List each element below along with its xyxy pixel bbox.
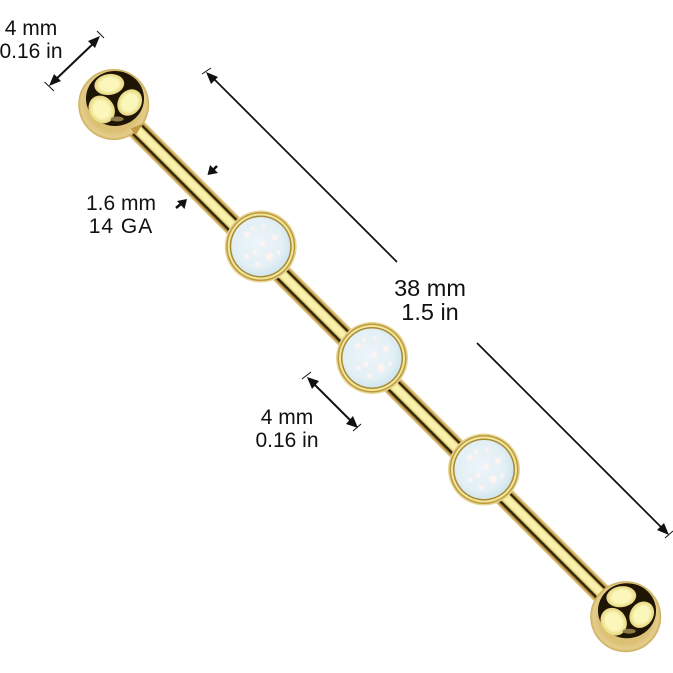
- label: gem size: [255, 406, 319, 452]
- barbell shaft: [106, 99, 632, 624]
- opal gem 1: [225, 210, 297, 282]
- label: ball size: 0.16 in: [0, 40, 63, 63]
- opal gem 3: [448, 434, 520, 506]
- label: length: 1.5 in: [401, 299, 459, 325]
- arrow: overall length lower: [477, 343, 673, 538]
- arrow: ball diameter: [44, 31, 104, 91]
- label: gauge: [86, 192, 156, 238]
- arrow: overall length upper: [202, 68, 397, 262]
- label: gem size: 0.16 in: [255, 429, 319, 452]
- label: ball size: 4 mm: [5, 17, 57, 40]
- label: length: 38 mm: [394, 275, 466, 301]
- label: gauge: 1.6 mm: [86, 192, 156, 215]
- label: length: [394, 275, 466, 325]
- label: ball size: [0, 17, 63, 63]
- arrow: gauge: [176, 165, 218, 209]
- opal gem 2: [336, 322, 408, 394]
- top ball: [78, 69, 149, 140]
- arrow: gem diameter: [302, 372, 361, 431]
- label: gauge: 14 GA: [89, 215, 153, 238]
- label: gem size: 4 mm: [261, 406, 313, 429]
- bottom ball: [590, 581, 661, 652]
